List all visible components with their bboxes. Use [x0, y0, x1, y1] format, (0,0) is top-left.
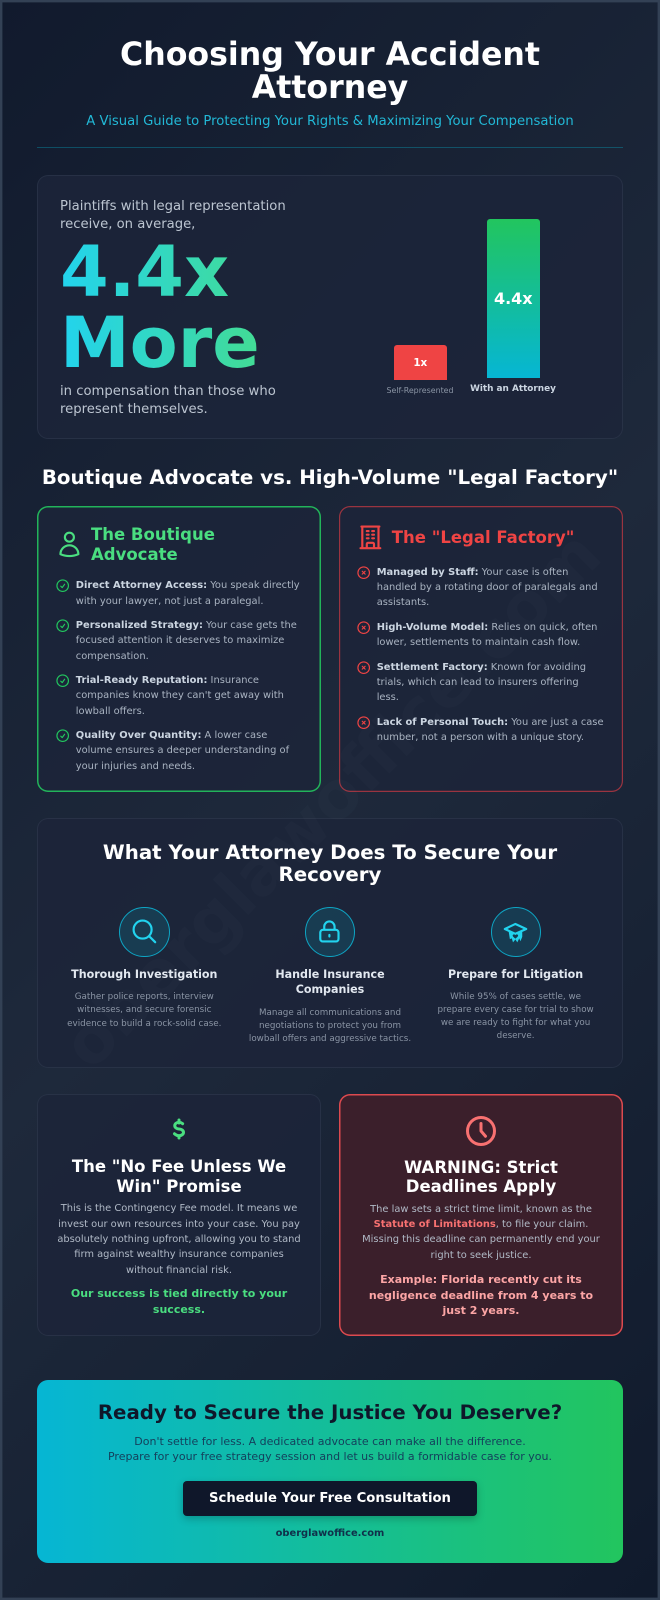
text: compensation. — [76, 651, 149, 662]
step description: prepare every case for trial to show — [437, 1005, 594, 1015]
bar: self-represented — [394, 345, 447, 380]
list item: high-volume model — [357, 621, 597, 648]
icon: x circle — [357, 716, 370, 729]
text: volume ensures a deeper understanding of — [76, 745, 289, 756]
step title — [275, 968, 385, 996]
icon: graduation cap — [491, 907, 541, 957]
title: Choosing Your Accident — [120, 36, 540, 72]
text: Lack of Personal Touch: You are just a case — [377, 716, 604, 728]
text: success statement: Our success is tied directly to your — [71, 1287, 287, 1300]
text: number, not a person with a unique story. — [377, 732, 584, 743]
step: handle insurance companies — [249, 907, 411, 1044]
text: High-Volume Model: Relies on quick, often — [377, 622, 597, 633]
text: statute explanation: Missing this deadline can permanently end your — [362, 1234, 600, 1245]
panel heading: boutique — [91, 525, 215, 564]
big number: 4.4x More: More — [60, 302, 260, 384]
text: statistic intro — [60, 199, 286, 232]
text: florida example — [339, 1272, 623, 1319]
text: statistic intro: receive, on average, — [60, 217, 195, 232]
text: statistic outro: represent themselves. — [60, 402, 208, 417]
text — [76, 675, 284, 717]
step title: Prepare for Litigation — [448, 968, 583, 981]
text: florida example: just 2 years. — [443, 1304, 519, 1317]
panel heading — [103, 841, 558, 886]
text: Direct Attorney Access: You speak directly — [76, 580, 300, 591]
title: Attorney — [252, 70, 408, 106]
step description — [437, 992, 594, 1041]
step title: Companies — [296, 983, 364, 996]
text: contingency explanation: absolutely nothing upfront, allowing you to stand — [57, 1234, 301, 1245]
icon: check — [56, 619, 69, 632]
list item: managed by staff — [357, 566, 598, 608]
text: Settlement Factory: Known for avoiding — [377, 662, 586, 672]
icon: x circle — [357, 661, 370, 674]
step title: Thorough Investigation — [71, 968, 217, 981]
step: thorough investigation — [67, 907, 221, 1028]
title — [120, 36, 540, 106]
text: statistic outro: in compensation than those who — [60, 384, 276, 399]
step description: deserve. — [497, 1031, 534, 1041]
big number: 4.4x More — [60, 236, 305, 378]
icon: office building — [359, 526, 382, 550]
panel: no fee promise — [37, 1094, 321, 1336]
label: self-represented: Self-Represented — [386, 386, 454, 395]
icon: check — [56, 674, 69, 687]
bar: with an attorney: 4.4x — [494, 289, 533, 308]
panel: the legal factory — [339, 506, 623, 792]
text: contingency explanation: This is the Contingency Fee model. It means we — [61, 1203, 297, 1214]
text: Personalized Strategy: Your case gets the — [76, 620, 297, 631]
cta heading: Ready to Secure the Justice You Deserve? — [98, 1401, 562, 1424]
icon: check — [56, 729, 69, 742]
text — [76, 730, 290, 772]
subtitle: A Visual Guide to Protecting Your Rights & Maximizing Your Compensation — [86, 114, 574, 129]
step description — [67, 992, 221, 1028]
bar: with an attorney — [487, 219, 540, 378]
icon: dollar sign — [172, 1118, 185, 1140]
icon: x circle — [357, 566, 370, 579]
text: trials, which can lead to insurers offering — [377, 677, 579, 688]
text: success statement — [37, 1286, 321, 1317]
panel: deadline warning — [339, 1094, 623, 1336]
step description: negotiations to protect you from — [259, 1021, 401, 1031]
icon: magnifying glass — [119, 907, 170, 957]
text: assistants. — [377, 597, 429, 608]
list item: settlement factory — [357, 661, 586, 703]
text: companies know they can't get away with — [76, 690, 284, 701]
panel: 4.4x statistic — [37, 175, 623, 439]
cta text: Don't settle for less. A dedicated advocate can make all the difference. — [134, 1435, 526, 1448]
watermark: oberglawoffice.com — [48, 516, 616, 1084]
panel heading: WARNING: Strict — [404, 1158, 558, 1176]
text: statistic outro — [60, 384, 276, 417]
panel heading: legal factory: The "Legal Factory" — [392, 528, 574, 547]
text: statistic intro: Plaintiffs with legal representation — [60, 199, 286, 214]
text: success statement: success. — [153, 1303, 205, 1316]
text: Trial-Ready Reputation: Insurance — [76, 675, 259, 686]
panel heading: Win" Promise — [116, 1177, 242, 1196]
text — [377, 662, 586, 703]
icon: check — [56, 579, 69, 592]
text: less. — [377, 692, 399, 703]
text: focused attention it deserves to maximize — [76, 635, 284, 646]
text: florida example: negligence deadline from 4 years to — [369, 1289, 593, 1302]
panel heading — [37, 1157, 321, 1197]
button: schedule consultation — [183, 1481, 477, 1516]
text — [76, 580, 300, 607]
step description — [249, 1008, 411, 1044]
panel heading: boutique: The Boutique — [91, 525, 215, 544]
icon: clock — [463, 1112, 499, 1148]
list item: trial-ready reputation — [56, 674, 284, 717]
text: contingency explanation: invest our own resources into your case. You pay — [58, 1219, 300, 1230]
panel: call to action — [37, 1380, 623, 1562]
bar chart: compensation comparison — [386, 219, 556, 395]
panel heading: What Your Attorney Does To Secure Your — [103, 841, 557, 864]
panel heading: Deadlines Apply — [406, 1177, 556, 1196]
text: your injuries and needs. — [76, 761, 195, 772]
step description: lowball offers and aggressive tactics. — [249, 1034, 411, 1044]
list item: personalized strategy — [56, 619, 297, 662]
icon: x circle — [357, 621, 370, 634]
text: florida example: Example: Florida recently cut its — [380, 1273, 582, 1286]
step description: While 95% of cases settle, we — [450, 992, 581, 1002]
text: statute explanation — [339, 1202, 623, 1263]
text — [377, 567, 598, 608]
panel: the boutique advocate — [37, 506, 321, 792]
panel heading: boutique: Advocate — [91, 545, 178, 564]
text: statute explanation: right to seek justice. — [431, 1250, 531, 1261]
step description: we are ready to fight for what you — [441, 1018, 590, 1028]
cta text: Prepare for your free strategy session and let us build a formidable case for you. — [108, 1450, 552, 1463]
step title: Handle Insurance — [275, 968, 385, 981]
step description: evidence to build a rock-solid case. — [67, 1018, 221, 1028]
text: statute explanation: The law sets a strict time limit, known as the — [370, 1204, 592, 1215]
step: prepare for litigation — [437, 907, 594, 1041]
text — [377, 622, 597, 648]
text — [377, 716, 604, 743]
panel: what your attorney does — [37, 818, 623, 1068]
list item: lack of personal touch — [357, 716, 604, 743]
text: with your lawyer, not just a paralegal. — [76, 596, 263, 607]
big number: 4.4x More: 4.4x — [60, 230, 229, 312]
step description: Gather police reports, interview — [75, 992, 214, 1002]
list item: direct attorney access — [56, 579, 300, 607]
icon: lock — [305, 907, 355, 957]
label: with an attorney: With an Attorney — [470, 384, 556, 394]
text — [76, 620, 297, 662]
text: statute explanation: Statute of Limitations, to file your claim. — [374, 1219, 588, 1230]
button: schedule consultation: Schedule Your Free Consultation — [209, 1491, 451, 1506]
text: contingency explanation: without financial risk. — [126, 1265, 232, 1276]
bar: self-represented: 1x — [413, 357, 427, 369]
text: Managed by Staff: Your case is often — [377, 567, 568, 578]
text: contingency explanation — [37, 1201, 321, 1278]
step description: Manage all communications and — [259, 1008, 401, 1018]
text: contingency explanation: firm against wealthy insurance companies — [74, 1249, 284, 1260]
panel heading: The "No Fee Unless We — [72, 1157, 286, 1176]
website: oberglawoffice.com — [276, 1528, 384, 1538]
icon: person — [59, 532, 80, 558]
panel heading — [339, 1158, 623, 1197]
list item: quality over quantity — [56, 729, 290, 772]
text: lowball offers. — [76, 706, 145, 717]
text: handled by a rotating door of paralegals and — [377, 582, 598, 593]
cta text — [37, 1434, 623, 1464]
step description: witnesses, and secure forensic — [77, 1005, 211, 1015]
text: Quality Over Quantity: A lower case — [76, 730, 267, 741]
text: lower, settlements to maintain cash flow. — [377, 637, 580, 648]
heading: comparison: Boutique Advocate vs. High-Volume "Legal Factory" — [42, 466, 618, 489]
panel heading: Recovery — [279, 863, 381, 886]
